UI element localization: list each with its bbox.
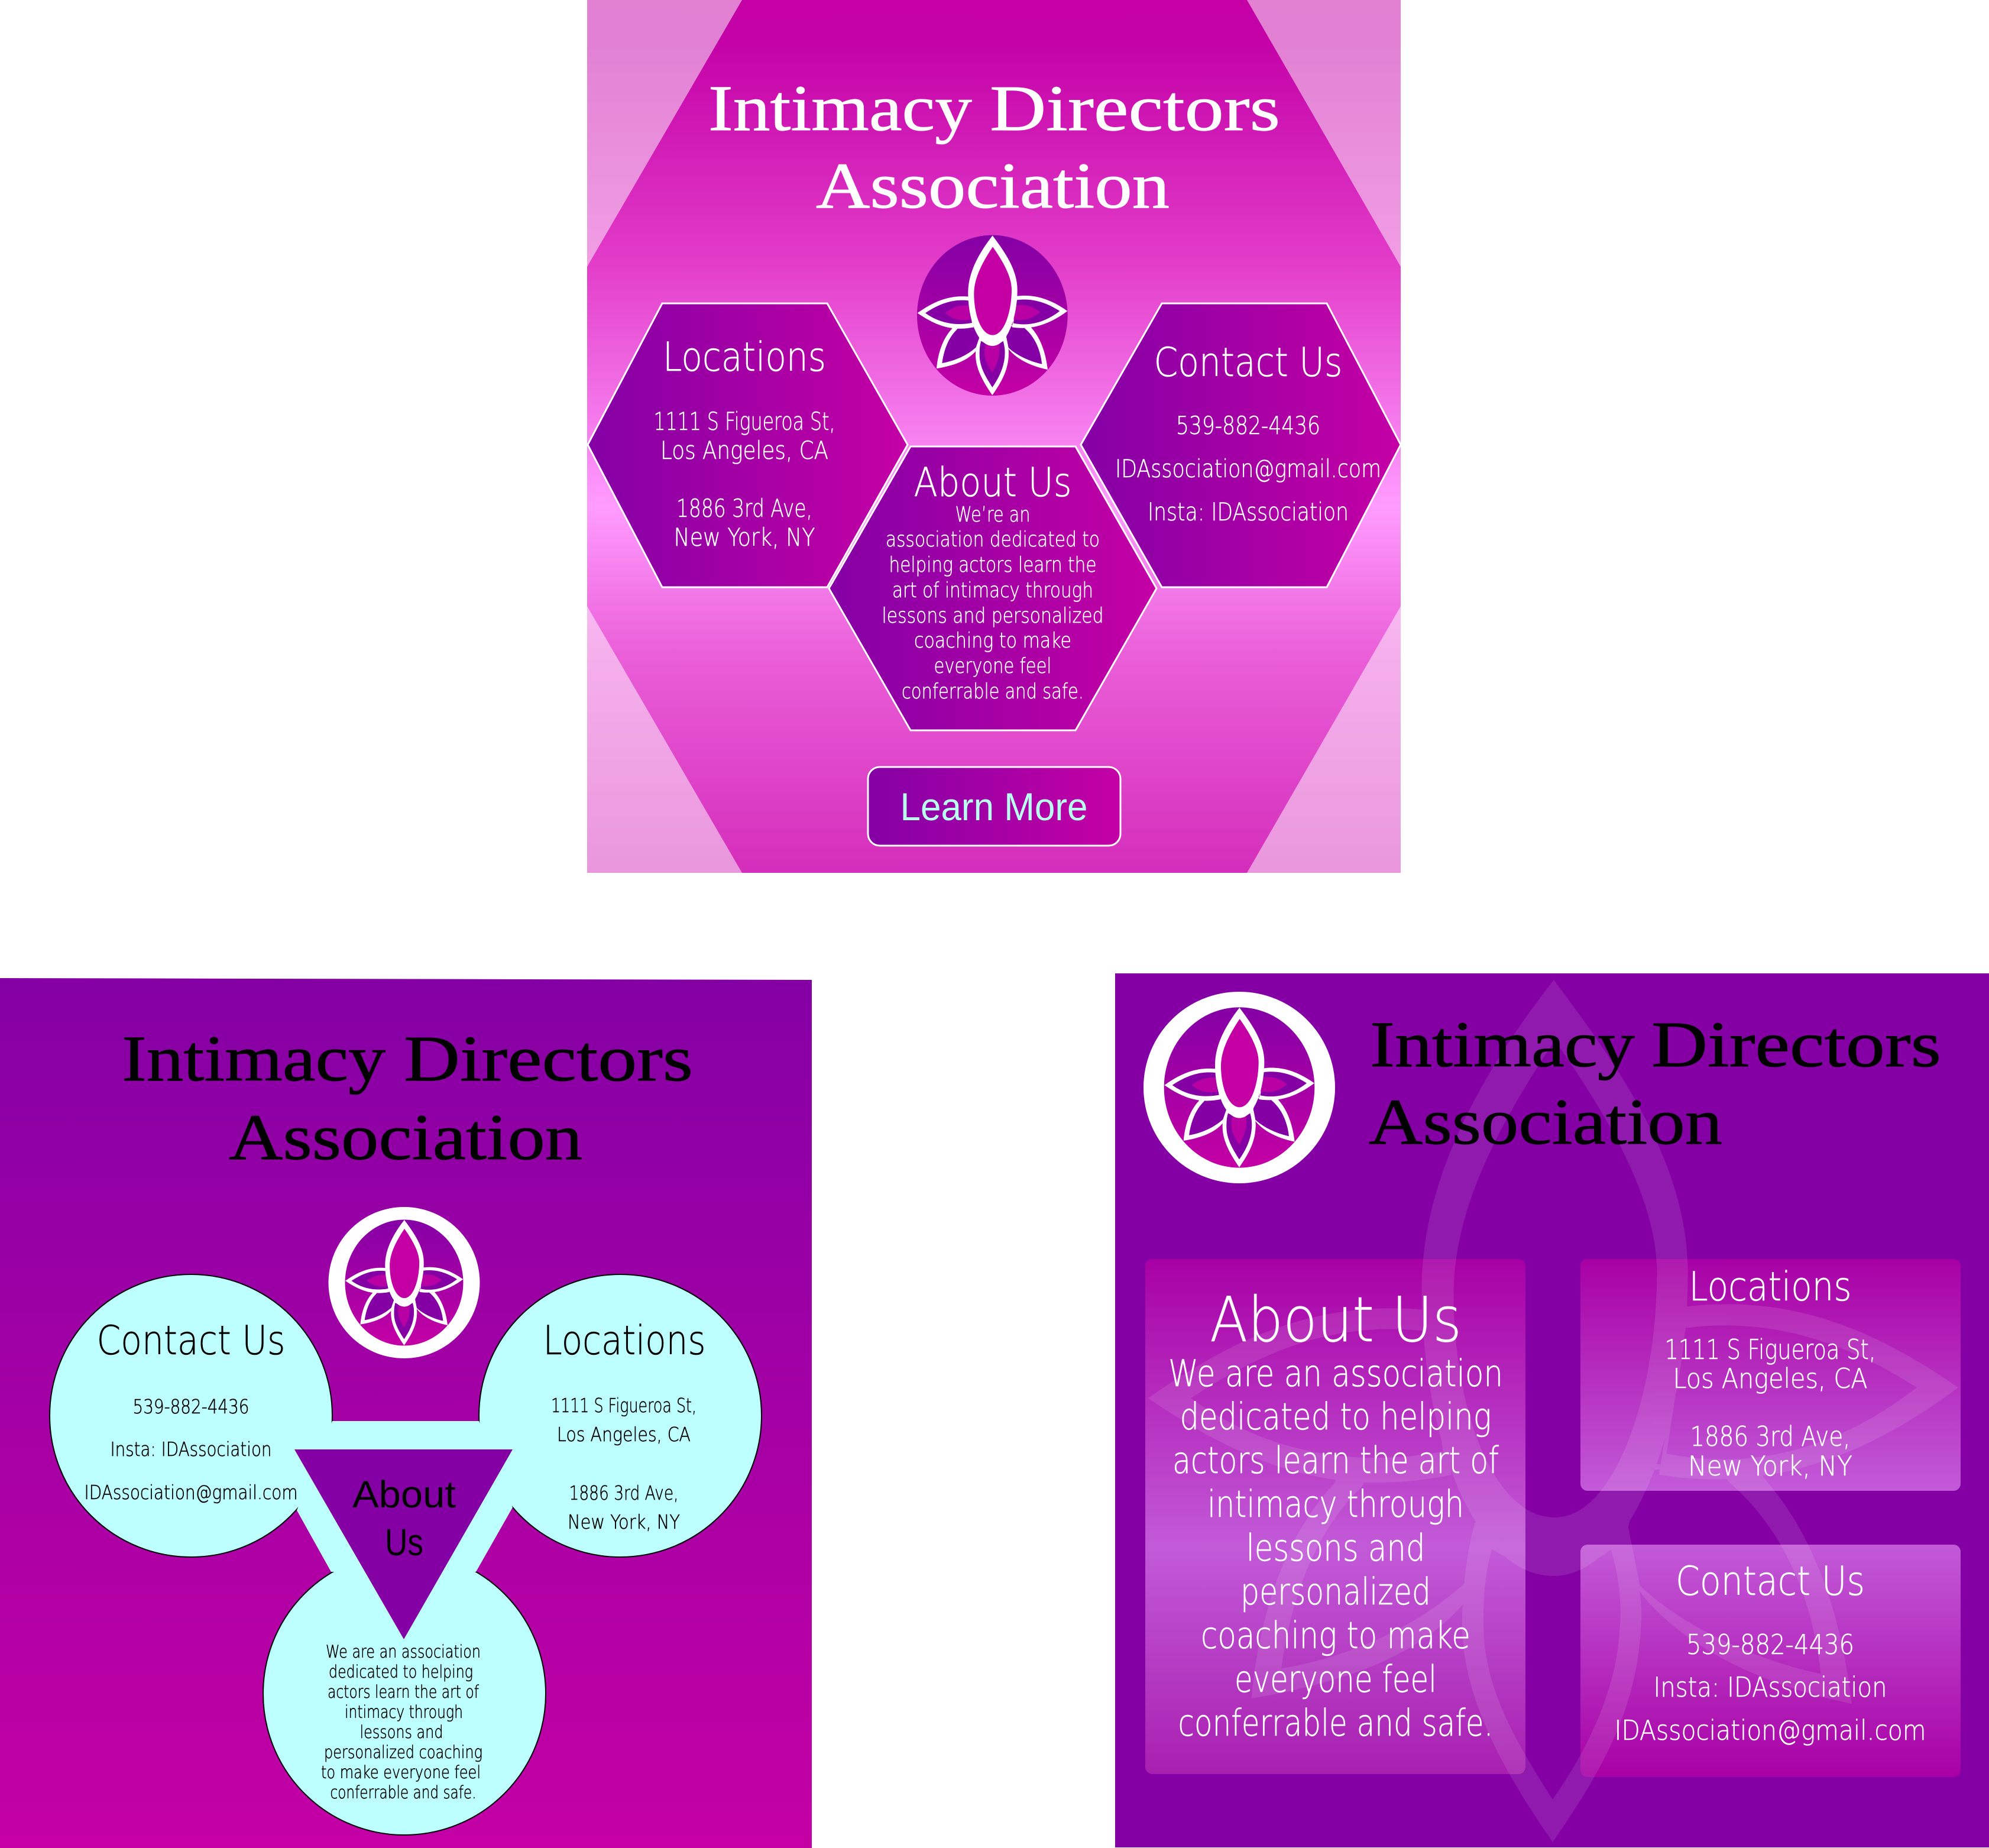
title: Association [1369, 1086, 1722, 1158]
hexagon: locations: New York, NY [674, 523, 815, 552]
text: contact us: IDAssociation@gmail.com [1614, 1714, 1926, 1746]
button: learn more [868, 767, 1120, 846]
text: locations: Los Angeles, CA [1673, 1362, 1867, 1394]
text: locations: 1886 3rd Ave, [1690, 1420, 1851, 1452]
text: locations: New York, NY [568, 1510, 680, 1533]
text: contact us: 539-882-4436 [1686, 1629, 1854, 1661]
text: about us description: intimacy through [345, 1702, 463, 1722]
icon: ringed lotus logo [1143, 992, 1335, 1183]
text: contact us: IDAssociation@gmail.com [84, 1481, 298, 1504]
text: contact us [1614, 1558, 1926, 1746]
text: locations: New York, NY [1688, 1450, 1852, 1482]
hexagon: locations: 1886 3rd Ave, [676, 494, 812, 523]
button: learn more: Learn More [900, 785, 1088, 828]
hexagon: about us: art of intimacy through [892, 578, 1093, 603]
hexagon: about us [829, 446, 1157, 730]
text: about us [1168, 1284, 1503, 1745]
text: about us description: actors learn the art of [328, 1682, 480, 1702]
title: Association [229, 1101, 582, 1173]
title: Intimacy [1370, 1008, 1635, 1080]
title: Directors [1651, 1008, 1941, 1080]
watermark: large lotus outline [1148, 980, 1958, 1842]
title: Directors [990, 72, 1280, 144]
lighter corner triangles [587, 0, 1401, 873]
panel: purple circles poster [0, 978, 812, 1848]
card: locations background [1580, 1259, 1961, 1491]
poster background [587, 0, 1401, 873]
text: about us: We are an association [1168, 1352, 1503, 1395]
text: locations: Locations [1689, 1264, 1852, 1310]
card: contact us background [1580, 1545, 1961, 1777]
text: about us: coaching to make [1201, 1614, 1470, 1657]
text: contact us: Insta: IDAssociation [110, 1438, 272, 1461]
title: Intimacy [708, 72, 972, 144]
card: about us background [1145, 1259, 1525, 1774]
hexagon: about us: coaching to make [914, 629, 1071, 653]
hexagon: about us: lessons and personalized [882, 604, 1103, 628]
icon: ringed lotus logo [329, 1207, 480, 1358]
text: locations [543, 1318, 706, 1533]
text: about us: About Us [1210, 1284, 1462, 1356]
triangle: about us: About [352, 1473, 456, 1516]
title [1369, 1008, 1941, 1158]
text: locations: 1111 S Figueroa St, [551, 1394, 697, 1417]
text: about us: actors learn the art of [1172, 1439, 1499, 1482]
text: locations: 1111 S Figueroa St, [1665, 1334, 1875, 1365]
title [708, 72, 1280, 222]
text: about us: dedicated to helping [1180, 1395, 1491, 1438]
title: Directors [404, 1022, 693, 1095]
text: about us description: lessons and [359, 1722, 443, 1742]
hexagon: locations: Los Angeles, CA [660, 436, 828, 465]
text: contact us: Contact Us [97, 1318, 285, 1364]
text: contact us: Contact Us [1676, 1558, 1865, 1605]
triangle: about us: Us [385, 1521, 423, 1564]
hexagon: contact us [1081, 303, 1401, 587]
text: about us description: personalized coaching [324, 1742, 482, 1762]
title [122, 1022, 693, 1173]
text: contact us: 539-882-4436 [132, 1395, 250, 1418]
panel: purple cards poster [1115, 973, 1989, 1847]
connected cyan circles [50, 1274, 762, 1835]
text: about us: conferrable and safe. [1178, 1701, 1494, 1745]
poster background [1115, 973, 1989, 1847]
text: about us: personalized [1240, 1570, 1431, 1613]
text: about us description: dedicated to helping [329, 1662, 473, 1682]
hexagon: locations [588, 303, 908, 587]
icon: lotus logo [917, 235, 1068, 396]
text: about us description [321, 1642, 482, 1802]
text: about us: lessons and [1246, 1526, 1425, 1569]
hexagon: about us: We’re an [955, 503, 1030, 527]
text: about us description: to make everyone feel [321, 1762, 481, 1782]
text: contact us: Insta: IDAssociation [1653, 1671, 1887, 1703]
text: locations: Los Angeles, CA [557, 1423, 691, 1446]
hexagon: about us: helping actors learn the [889, 553, 1096, 577]
hexagon: locations: Locations [663, 334, 826, 381]
title: Association [816, 150, 1170, 222]
hexagon: contact us: 539-882-4436 [1176, 411, 1320, 440]
hexagon: contact us: IDAssociation@gmail.com [1115, 454, 1381, 483]
hexagon: about us: About Us [914, 459, 1071, 506]
text: contact us [84, 1318, 298, 1504]
text: locations [1665, 1264, 1875, 1482]
text: locations: Locations [543, 1318, 706, 1364]
text: about us: everyone feel [1235, 1658, 1437, 1701]
text: about us description: We are an association [326, 1642, 481, 1662]
hexagon: contact us: Contact Us [1154, 339, 1342, 386]
triangle: about us [294, 1449, 513, 1639]
text: locations: 1886 3rd Ave, [569, 1481, 679, 1504]
poster background [0, 978, 812, 1848]
hexagon: about us: association dedicated to [886, 527, 1100, 552]
hexagon: locations: 1111 S Figueroa St, [654, 407, 835, 436]
panel: pink hexagon poster [587, 0, 1401, 873]
text: about us: intimacy through [1207, 1483, 1464, 1526]
hexagon: contact us: Insta: IDAssociation [1148, 497, 1349, 526]
text: about us description: conferrable and safe. [330, 1782, 477, 1802]
title: Intimacy [122, 1022, 386, 1095]
hexagon: about us: conferrable and safe. [902, 679, 1084, 704]
hexagon: about us: everyone feel [934, 654, 1051, 678]
